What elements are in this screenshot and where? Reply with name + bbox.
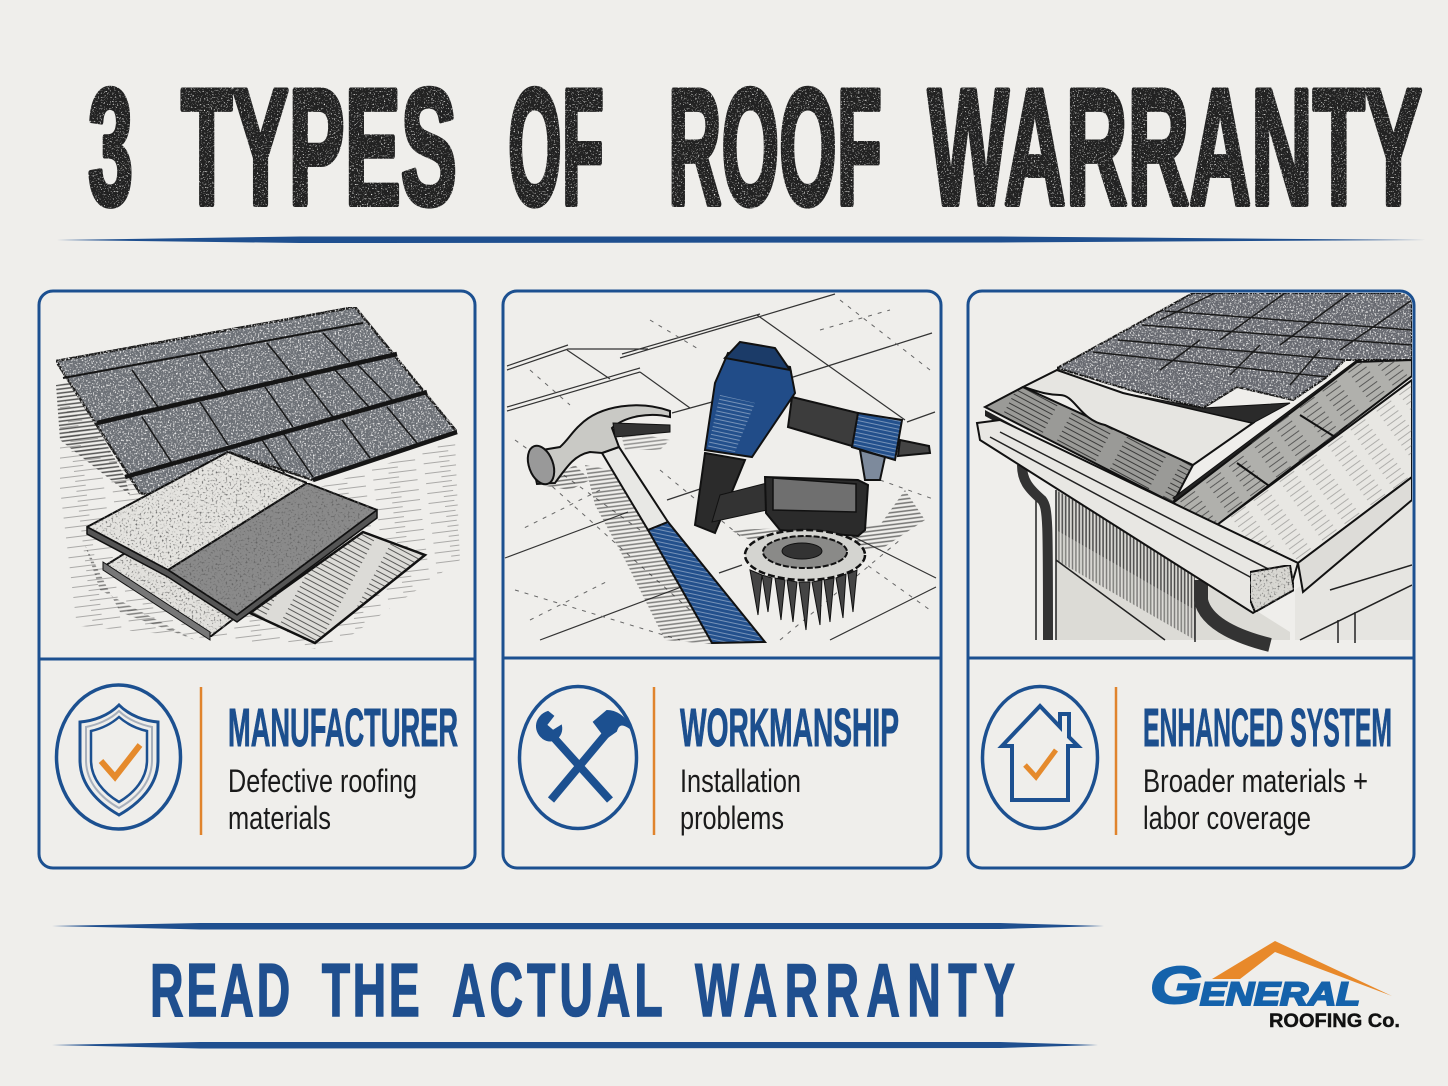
description: enhanced system <box>1143 763 1368 836</box>
title: TYPES <box>181 55 457 239</box>
icon: house with check <box>982 686 1098 828</box>
description: manufacturer <box>228 763 417 836</box>
title <box>88 55 1422 239</box>
logo: General Roofing Co.: ROOFING Co. <box>1269 1011 1400 1032</box>
footer callout: ACTUAL <box>452 950 663 1033</box>
panel: manufacturer <box>39 291 475 868</box>
panel text: manufacturer <box>56 685 458 836</box>
footer callout: WARRANTY <box>695 950 1015 1033</box>
nail gun <box>788 397 858 447</box>
hammer <box>602 447 668 530</box>
panel: enhanced system <box>968 291 1414 868</box>
description: manufacturer: Defective roofing <box>228 763 417 799</box>
heading: workmanship: WORKMANSHIP <box>680 698 899 758</box>
heading: manufacturer: MANUFACTURER <box>228 698 458 758</box>
logo: General Roofing Co.: ENERAL <box>1200 976 1360 1012</box>
title: OF <box>508 55 604 239</box>
nail coil <box>750 570 857 630</box>
description: workmanship: problems <box>680 800 784 836</box>
icon: crossed wrench and hammer <box>520 686 636 828</box>
description: workmanship <box>680 763 801 836</box>
description: workmanship: Installation <box>680 763 801 799</box>
description: enhanced system: Broader materials + <box>1143 763 1368 799</box>
footer callout: THE <box>322 950 420 1033</box>
description: manufacturer: materials <box>228 800 331 836</box>
panel text: workmanship <box>520 686 899 836</box>
panel: workmanship <box>503 291 941 868</box>
title: 3 <box>88 55 133 239</box>
footer callout: READ <box>150 950 290 1033</box>
icon: shield with check <box>56 685 180 829</box>
logo: General Roofing Co. <box>1150 941 1400 1032</box>
description: enhanced system: labor coverage <box>1143 800 1311 836</box>
panel text: enhanced system <box>982 686 1392 836</box>
logo: General Roofing Co.: G <box>1150 957 1202 1015</box>
illustration: hammer, nail gun and nail coil <box>505 294 936 645</box>
illustration: roof edge cutaway <box>977 293 1412 645</box>
footer callout <box>52 923 1104 1048</box>
illustration: shingles and sample sheets <box>56 307 460 650</box>
title: ROOF <box>668 55 882 239</box>
